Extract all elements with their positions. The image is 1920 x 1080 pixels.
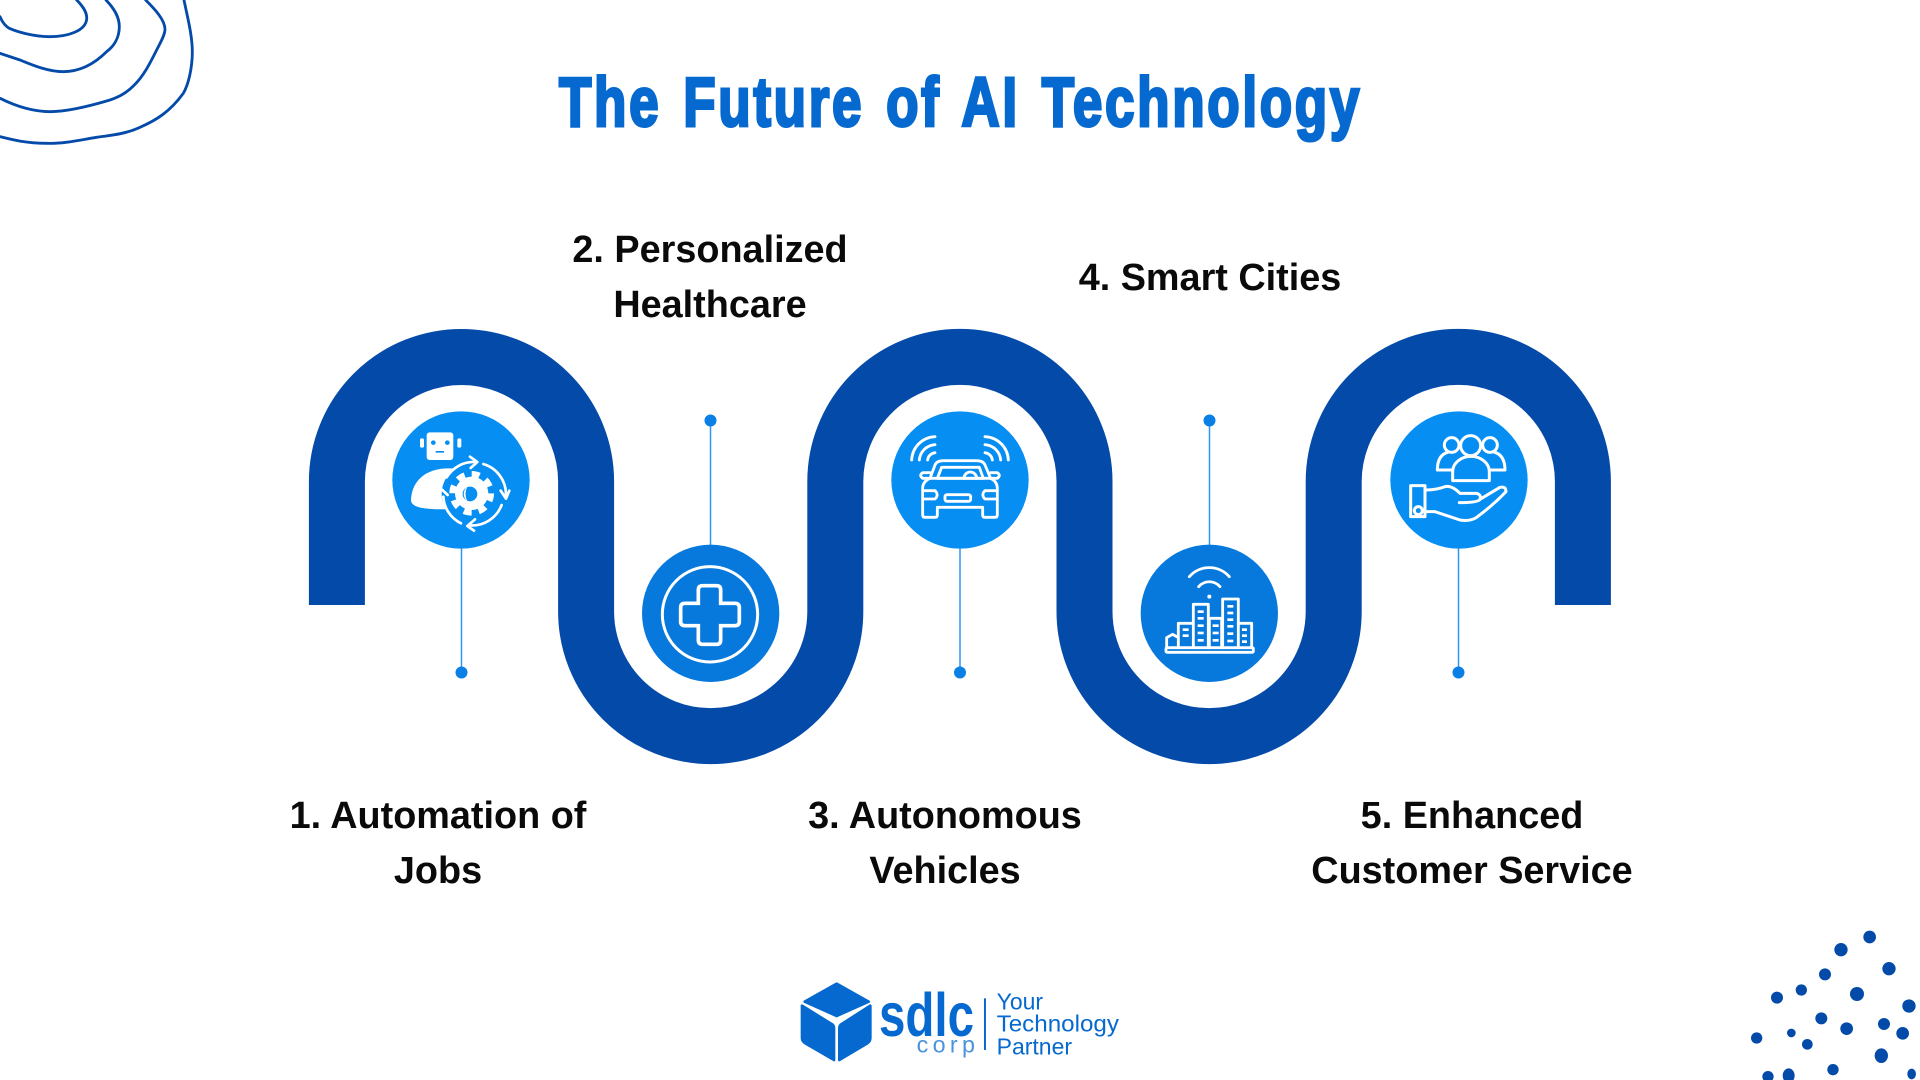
- label 2: [572, 229, 848, 326]
- logo tagline: [997, 988, 1119, 1059]
- icon: connected car: [891, 411, 1029, 549]
- logo tagline: Technology: [997, 1011, 1119, 1037]
- icon: robot and gear: [392, 411, 530, 549]
- connector 2: [704, 414, 716, 548]
- connector 3: [954, 545, 966, 678]
- decoration: dots bottom right: [1751, 931, 1916, 1080]
- icon: smart city: [1141, 545, 1278, 682]
- label 1: Jobs: [394, 850, 482, 892]
- logo wordmark: sdlc: [879, 981, 974, 1050]
- label 4: 4. Smart Cities: [1079, 257, 1341, 299]
- label 3: 3. Autonomous: [808, 795, 1082, 837]
- icon: customer service hand: [1390, 411, 1528, 549]
- label 2: 2. Personalized: [572, 229, 848, 271]
- icon: cube: [802, 984, 870, 1060]
- label 1: 1. Automation of: [290, 795, 587, 837]
- label 5: [1311, 795, 1633, 892]
- connector 1: [456, 545, 468, 678]
- decoration: contour lines top left: [0, 0, 192, 143]
- icon: medical cross: [642, 545, 779, 682]
- connector 5: [1452, 545, 1464, 678]
- connector 4: [1204, 414, 1216, 548]
- title: The Future of AI Technology: [559, 63, 1362, 141]
- serpentine road: [337, 357, 1583, 736]
- label 5: 5. Enhanced: [1361, 795, 1583, 837]
- label 3: [808, 795, 1082, 892]
- logo tagline: Partner: [997, 1033, 1072, 1059]
- label 5: Customer Service: [1311, 850, 1633, 892]
- label 3: Vehicles: [869, 850, 1021, 892]
- logo: SDLC Corp: [802, 981, 1119, 1060]
- logo: SDLC Corp: corp: [917, 1032, 975, 1058]
- label 2: Healthcare: [613, 284, 807, 326]
- label 1: [290, 795, 587, 892]
- logo tagline: Your: [997, 988, 1043, 1014]
